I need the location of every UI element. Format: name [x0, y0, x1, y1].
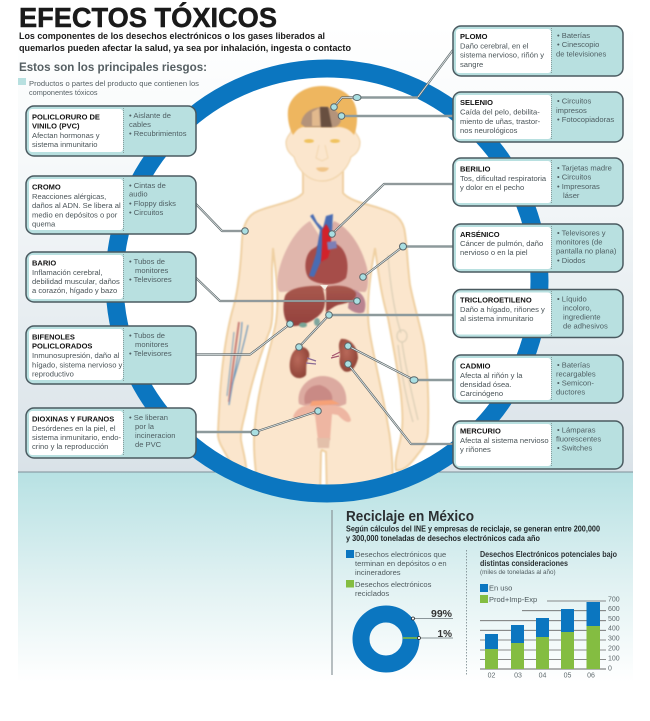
effects text: ARSÉNICO — [460, 230, 500, 239]
year axis: 06 — [587, 672, 595, 680]
year axis: 04 — [539, 672, 546, 680]
products list: • Baterías — [557, 31, 590, 40]
donut legend: incineradores — [355, 568, 401, 577]
vertical rule — [331, 510, 333, 675]
effects text: Daño a hígado, riñones y — [460, 305, 545, 314]
effects text: sistema inmunitario, endo- — [32, 433, 122, 442]
arm veins — [227, 322, 248, 405]
effects text: Inflamación cerebral, — [32, 268, 102, 277]
products list: recargables — [556, 370, 596, 378]
recycling intro: Según cálculos del INE y empresas de reciclaje, se generan entre 200,000 — [346, 524, 600, 534]
value axis: 700 — [608, 596, 620, 604]
products list: • Cinescopio — [557, 40, 599, 49]
panel: berilio — [453, 158, 623, 206]
bar chart legend — [480, 584, 537, 604]
effects text: MERCURIO — [460, 426, 501, 436]
products list: • Recubrimientos — [129, 129, 187, 138]
effects text: Afecta al sistema nervioso — [460, 436, 549, 445]
effects text: Reacciones alérgicas, — [32, 192, 106, 201]
products list: • Semicon- — [557, 378, 594, 388]
effects text: Afectan hormonas y — [32, 131, 100, 140]
intro text: Los componentes de los desechos electrónicos o los gases liberados al — [19, 31, 325, 41]
effects text: BIFENOLES — [32, 332, 75, 342]
legend: products: Productos o partes del producto que contienen los — [29, 79, 199, 88]
bar chart heading: Desechos Electrónicos potenciales bajo — [480, 550, 617, 559]
donut legend: Desechos electrónicos — [355, 580, 432, 589]
effects text: Desórdenes en la piel, el — [32, 424, 116, 433]
bar chart legend: En uso — [489, 584, 512, 592]
background panel — [18, 25, 633, 472]
recycling heading: Reciclaje en México — [346, 508, 474, 525]
connector: selenio — [338, 113, 453, 119]
effects text: BARIO — [32, 258, 56, 268]
products list: • Floppy disks — [129, 199, 176, 208]
year axis: 02 — [488, 672, 495, 680]
products list: • Televisores — [129, 275, 172, 284]
effects text: POLICLORADOS — [32, 342, 92, 350]
products list: fluorescentes — [556, 434, 601, 444]
products list: • Impresoras — [557, 182, 600, 191]
liver and stomach — [348, 290, 365, 313]
panel: bario — [26, 252, 196, 302]
panel: policloruro de vinilo — [26, 106, 196, 156]
donut legend — [346, 550, 447, 598]
effects text: hígado, sistema nervioso y — [32, 360, 123, 370]
products list: • Tubos de — [129, 331, 165, 340]
panel: selenio — [453, 92, 623, 142]
connector: bifenoles — [195, 321, 293, 354]
effects text: SELENIO — [460, 98, 493, 107]
products list: por la — [135, 422, 155, 431]
bar chart — [480, 596, 620, 680]
effects text: debilidad muscular, daños — [32, 277, 120, 286]
effects text: al sistema inmunitario — [460, 314, 533, 323]
products list: • Circuitos — [129, 208, 164, 217]
effects text: Daño cerebral, en el — [460, 42, 529, 50]
connector: mercurio — [345, 361, 453, 444]
effects text: reproductivo — [32, 370, 74, 378]
effects text: BERILIO — [460, 164, 491, 174]
value axis: 600 — [608, 606, 620, 613]
effects text: Inmunosupresión, daño al — [32, 351, 120, 360]
panel: dioxinas y furanos — [26, 408, 196, 458]
panel: cromo — [26, 176, 196, 234]
effects text: POLICLORURO DE — [32, 112, 100, 122]
value axis: 200 — [608, 646, 620, 652]
products list: de adhesivos — [563, 322, 608, 330]
panel: tricloroetileno — [453, 290, 623, 338]
effects text: PLOMO — [460, 32, 488, 41]
legend: products — [18, 78, 199, 97]
effects text: Tos, dificultad respiratoria — [460, 174, 547, 183]
effects text: quema — [32, 220, 56, 228]
connector: dioxinas — [195, 408, 321, 436]
effects text: crino y la reproducción — [32, 442, 108, 451]
effects text: sangre — [460, 60, 483, 69]
effects text: miento de uñas, trastor- — [460, 117, 541, 126]
connector: cadmio — [345, 343, 453, 383]
value axis: 0 — [608, 666, 612, 672]
head — [286, 125, 360, 181]
recycling section background — [18, 472, 633, 682]
hair — [288, 86, 357, 135]
effects text: medio en depósitos o por — [32, 210, 118, 220]
products list: • Tubos de — [129, 257, 165, 266]
products list: audio — [129, 190, 148, 198]
products list: • Se liberan — [129, 413, 168, 422]
donut legend: Desechos electrónicos que — [355, 550, 446, 559]
products list: impresos — [556, 106, 587, 115]
panel: plomo — [453, 26, 623, 76]
lungs — [277, 221, 322, 292]
panel: cadmio — [453, 355, 623, 403]
effects text: Carcinógeno — [460, 389, 503, 398]
products list: ingrediente — [563, 312, 601, 322]
connector: cromo — [195, 203, 248, 234]
connector: bario — [195, 277, 360, 304]
panel: arsenico — [453, 224, 623, 272]
effects text: DIOXINAS Y FURANOS — [32, 414, 114, 424]
products list: • Circuitos — [557, 96, 592, 106]
effects text: sistema inmunitario — [32, 140, 97, 149]
products list: cables — [129, 120, 151, 129]
effects text: a corazón, hígado y bazo — [32, 286, 117, 295]
effects text: y riñones — [460, 445, 491, 454]
products list: pantalla no plana) — [556, 246, 617, 256]
products list: • Cintas de — [129, 181, 166, 190]
kidneys — [290, 347, 309, 378]
exposed brain — [301, 107, 341, 127]
products list: incoloro, — [563, 304, 592, 312]
subheading: Estos son los principales riesgos: — [19, 60, 207, 74]
products list: • Circuitos — [557, 172, 592, 182]
year axis: 03 — [514, 672, 522, 680]
connector: tricloroetileno — [296, 312, 453, 350]
panel: bifenoles policlorados — [26, 326, 196, 384]
bar chart units: (miles de toneladas al año) — [480, 569, 556, 576]
effects text: VINILO (PVC) — [32, 122, 80, 130]
heart and vessels — [305, 243, 348, 284]
donut chart: 1% — [438, 629, 452, 640]
arm bones — [388, 255, 418, 422]
bars — [485, 602, 600, 669]
effects text: nos neurológicos — [460, 126, 518, 135]
products list: • Líquido — [557, 294, 587, 304]
donut legend: reciclados — [355, 589, 389, 598]
effects text: sistema nervioso, riñón y — [460, 50, 544, 60]
effects text: CADMIO — [460, 362, 491, 370]
effects text: Afecta al riñón y la — [460, 371, 523, 380]
human body illustration — [218, 86, 428, 500]
products list: • Aislante de — [129, 111, 171, 120]
blue ring — [114, 68, 540, 494]
products list: • Televisores y — [557, 228, 606, 238]
effects text: y dolor en el pecho — [460, 183, 524, 192]
legend: products: componentes tóxicos — [29, 88, 98, 97]
white circle — [123, 77, 531, 485]
title: EFECTOS TÓXICOS — [19, 2, 277, 33]
effects text: Cáncer de pulmón, daño — [460, 239, 543, 248]
effects text: Caída del pelo, debilita- — [460, 108, 540, 116]
value axis: 100 — [608, 656, 620, 662]
products list: • Fotocopiadoras — [557, 115, 614, 124]
recycling intro: y 300,000 toneladas de desechos electrónicos cada año — [346, 534, 540, 543]
year axis: 05 — [564, 672, 571, 680]
products list: monitores — [135, 266, 169, 275]
products list: de PVC — [135, 440, 162, 449]
products list: monitores (de — [556, 238, 602, 246]
products list: láser — [563, 191, 580, 200]
donut chart: 99% — [431, 608, 453, 620]
products list: • Tarjetas madre — [557, 164, 612, 172]
products list: de televisiones — [556, 50, 606, 58]
value axis: 500 — [608, 616, 620, 623]
products list: ductores — [556, 388, 585, 396]
connector: arsenico — [360, 243, 453, 280]
grid lines — [480, 601, 606, 669]
dotted divider — [466, 550, 468, 675]
effects text: CROMO — [32, 182, 61, 192]
value axis: 300 — [608, 636, 620, 642]
products list: • Lámparas — [557, 426, 596, 434]
products list: • Diodos — [557, 256, 586, 265]
panel: mercurio — [453, 421, 623, 469]
donut legend: terminan en depósitos o en — [355, 559, 447, 568]
body silhouette — [218, 172, 428, 500]
bar chart heading: distintas consideraciones — [480, 559, 568, 568]
products list: incineracion — [135, 431, 176, 440]
eyes and mouth — [304, 139, 314, 143]
products list: • Televisores — [129, 349, 172, 358]
value axis: 400 — [608, 626, 620, 632]
products list: monitores — [135, 340, 169, 349]
bar chart legend: Prod+Imp-Exp — [489, 595, 537, 604]
products list: • Switches — [557, 444, 592, 452]
intro text: quemarlos pueden afectar la salud, ya sea por inhalación, ingesta o contacto — [19, 43, 351, 53]
products list: • Baterías — [557, 360, 590, 370]
effects text: daños al ADN. Se libera al — [32, 201, 121, 210]
effects text: TRICLOROETILENO — [460, 296, 532, 304]
connector: plomo — [331, 50, 453, 110]
reproductive organs — [298, 376, 346, 408]
connector: berilio — [329, 184, 453, 237]
effects text: densidad ósea. — [460, 380, 512, 389]
effects text: nervioso o en la piel — [460, 248, 528, 257]
donut chart — [361, 608, 453, 664]
